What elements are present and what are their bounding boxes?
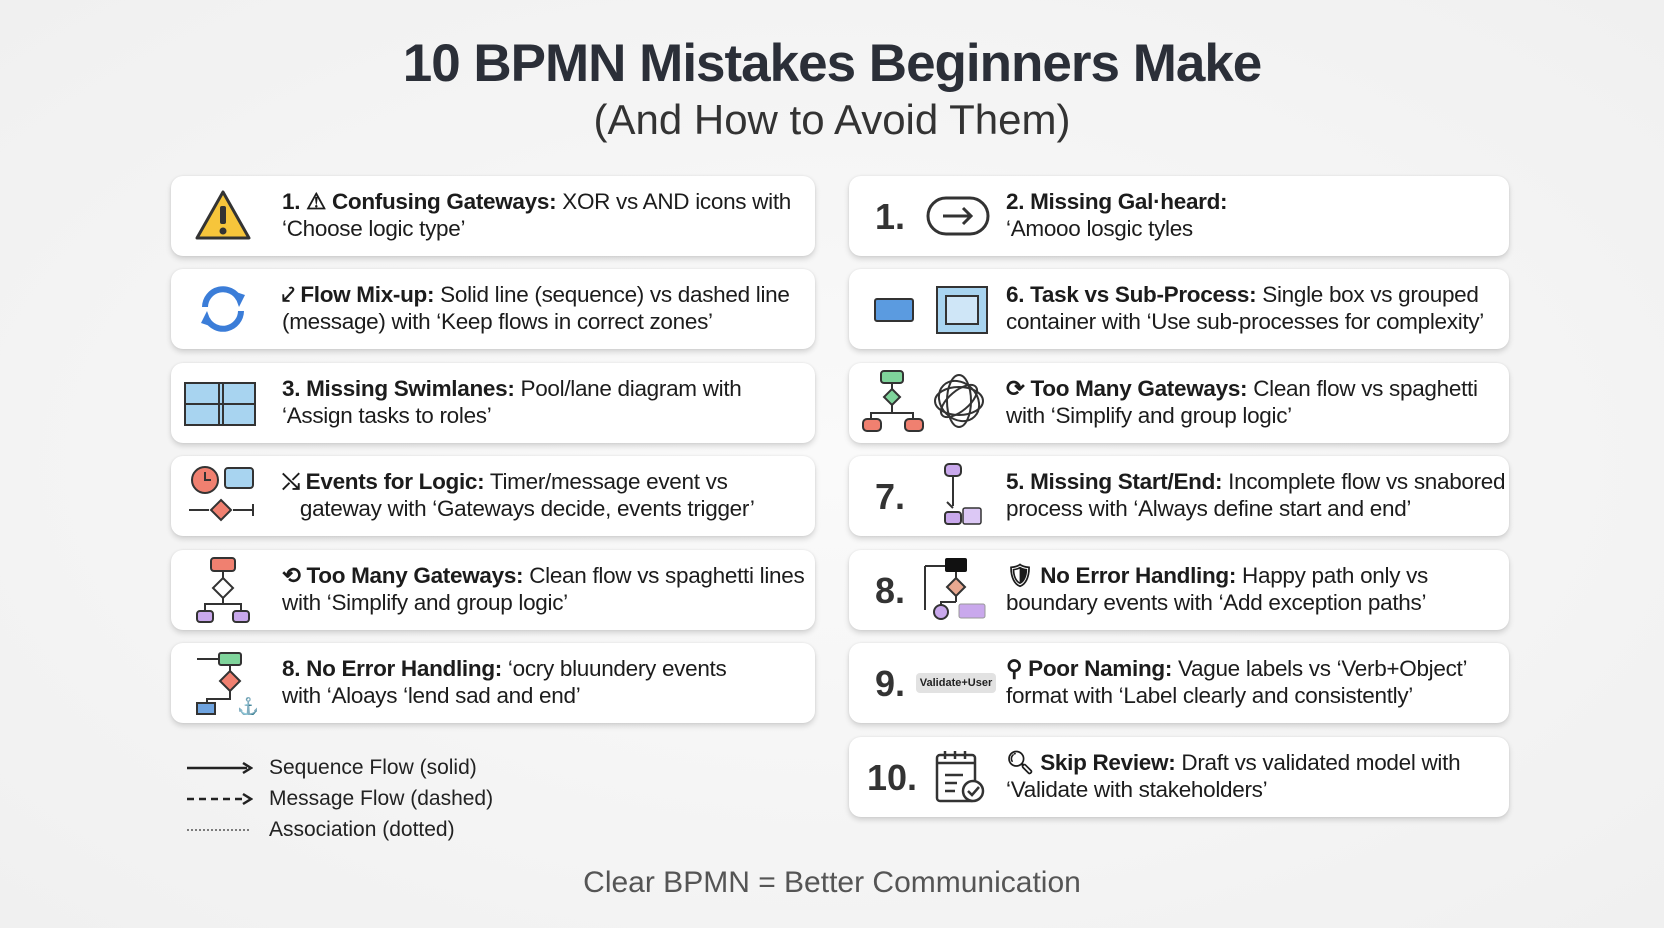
- text: 🛡 No Error Handling: Happy path only vs: [1006, 563, 1428, 588]
- text: [1006, 469, 1505, 520]
- text: ⤯ Events for Logic: Timer/message event vs: [282, 469, 728, 494]
- text: container with ‘Use sub-processes for complexity’: [1006, 308, 1484, 334]
- icon: task and subprocess: [874, 286, 988, 334]
- text: [282, 189, 791, 240]
- panel: card 6 no error handling: [171, 643, 815, 723]
- legend: message: Message Flow (dashed): [269, 787, 493, 810]
- text: ⟳ Too Many Gateways: Clean flow vs spaghetti: [1006, 376, 1478, 401]
- icon: flow with boundary: [924, 558, 986, 620]
- panel: right card 9 poor naming: 9.: [875, 663, 905, 704]
- icon: refresh arrows: [201, 286, 245, 332]
- icon: label tag: [916, 673, 996, 693]
- icon: clean flow vs spaghetti: [862, 370, 984, 432]
- panel: right card 7 missing start/end: 7.: [875, 476, 905, 517]
- title: 10 BPMN Mistakes Beginners Make: [403, 34, 1261, 93]
- text: 1. ⚠ Confusing Gateways: XOR vs AND icons with: [282, 189, 791, 214]
- icon: arrow box: [926, 196, 990, 236]
- panel: card 1 confusing gateways: [171, 176, 815, 256]
- text: 8. No Error Handling: ‘ocry bluundery events: [282, 656, 726, 681]
- subtitle: (And How to Avoid Them): [593, 96, 1070, 143]
- panel: right card 2: 1.: [875, 196, 905, 237]
- icon: flow with anchor: [196, 652, 257, 715]
- icon: label tag: Validate+User: [920, 677, 992, 689]
- text: [1006, 750, 1460, 802]
- text: ⚲ Poor Naming: Vague labels vs ‘Verb+Object’: [1006, 656, 1467, 681]
- panel: right card 10 skip review: 10.: [867, 757, 917, 798]
- icon: pool lanes: [184, 382, 256, 426]
- panel: right card 8 no error handling: 8.: [875, 570, 905, 611]
- text: ‘Amooo losgic tyles: [1006, 216, 1193, 240]
- text: with ‘Simplify and group logic’: [282, 590, 568, 614]
- panel: right card 2: [849, 176, 1509, 256]
- legend: sequence: Sequence Flow (solid): [269, 756, 477, 779]
- text: [282, 282, 790, 334]
- text: [1006, 563, 1428, 614]
- text: boundary events with ‘Add exception paths’: [1006, 590, 1426, 614]
- text: [282, 563, 804, 614]
- legend: association: Association (dotted): [269, 818, 455, 841]
- panel: right card 7 missing start/end: [849, 456, 1509, 536]
- text: ‘Validate with stakeholders’: [1006, 776, 1267, 802]
- text: 6. Task vs Sub-Process: Single box vs grouped: [1006, 282, 1479, 307]
- text: process with ‘Always define start and end’: [1006, 496, 1411, 520]
- text: 🔍︎ Skip Review: Draft vs validated model with: [1006, 750, 1460, 775]
- text: (message) with ‘Keep flows in correct zones’: [282, 308, 713, 334]
- text: [282, 469, 755, 520]
- text: format with ‘Label clearly and consistently’: [1006, 682, 1413, 708]
- text: [282, 656, 726, 708]
- icon: checklist calendar: [936, 751, 984, 802]
- text: 2. Missing Gal·heard:: [1006, 189, 1227, 214]
- legend: association: [187, 818, 455, 841]
- panel: right card 8 no error handling: [849, 550, 1509, 630]
- legend: [187, 756, 493, 841]
- text: 5. Missing Start/End: Incomplete flow vs snabored: [1006, 469, 1505, 494]
- text: ‘Choose logic type’: [282, 216, 465, 240]
- icon: incomplete flow: [944, 463, 982, 525]
- text: ‘Assign tasks to roles’: [282, 402, 491, 428]
- text: [1006, 376, 1478, 428]
- text: [282, 376, 742, 428]
- panel: card 5 too many gateways: [171, 550, 815, 630]
- footer: Clear BPMN = Better Communication: [583, 866, 1081, 899]
- text: gateway with ‘Gateways decide, events trigger’: [300, 496, 755, 520]
- text: 3. Missing Swimlanes: Pool/lane diagram with: [282, 376, 742, 401]
- text: with ‘Aloays ‘lend sad and end’: [282, 682, 580, 708]
- text: [1006, 189, 1227, 240]
- icon: timer message gateway: [189, 466, 254, 522]
- panel: right card 10 skip review: [849, 737, 1509, 817]
- panel: right card too many gateways: [849, 363, 1509, 443]
- text: ⤦ Flow Mix-up: Solid line (sequence) vs dashed line: [282, 282, 790, 307]
- icon: warning: [196, 190, 251, 240]
- panel: card 4 events for logic: [171, 456, 815, 536]
- panel: card 2 flow mix-up: [171, 269, 815, 349]
- panel: right card 9 poor naming: [849, 643, 1509, 723]
- text: ⟲ Too Many Gateways: Clean flow vs spaghetti lines: [282, 563, 804, 588]
- panel: card 3 swimlanes: [171, 363, 815, 443]
- panel: right card task vs sub-process: [849, 269, 1509, 349]
- text: [1006, 282, 1484, 334]
- text: with ‘Simplify and group logic’: [1006, 402, 1292, 428]
- text: [1006, 656, 1467, 708]
- icon: flowchart: [196, 557, 250, 623]
